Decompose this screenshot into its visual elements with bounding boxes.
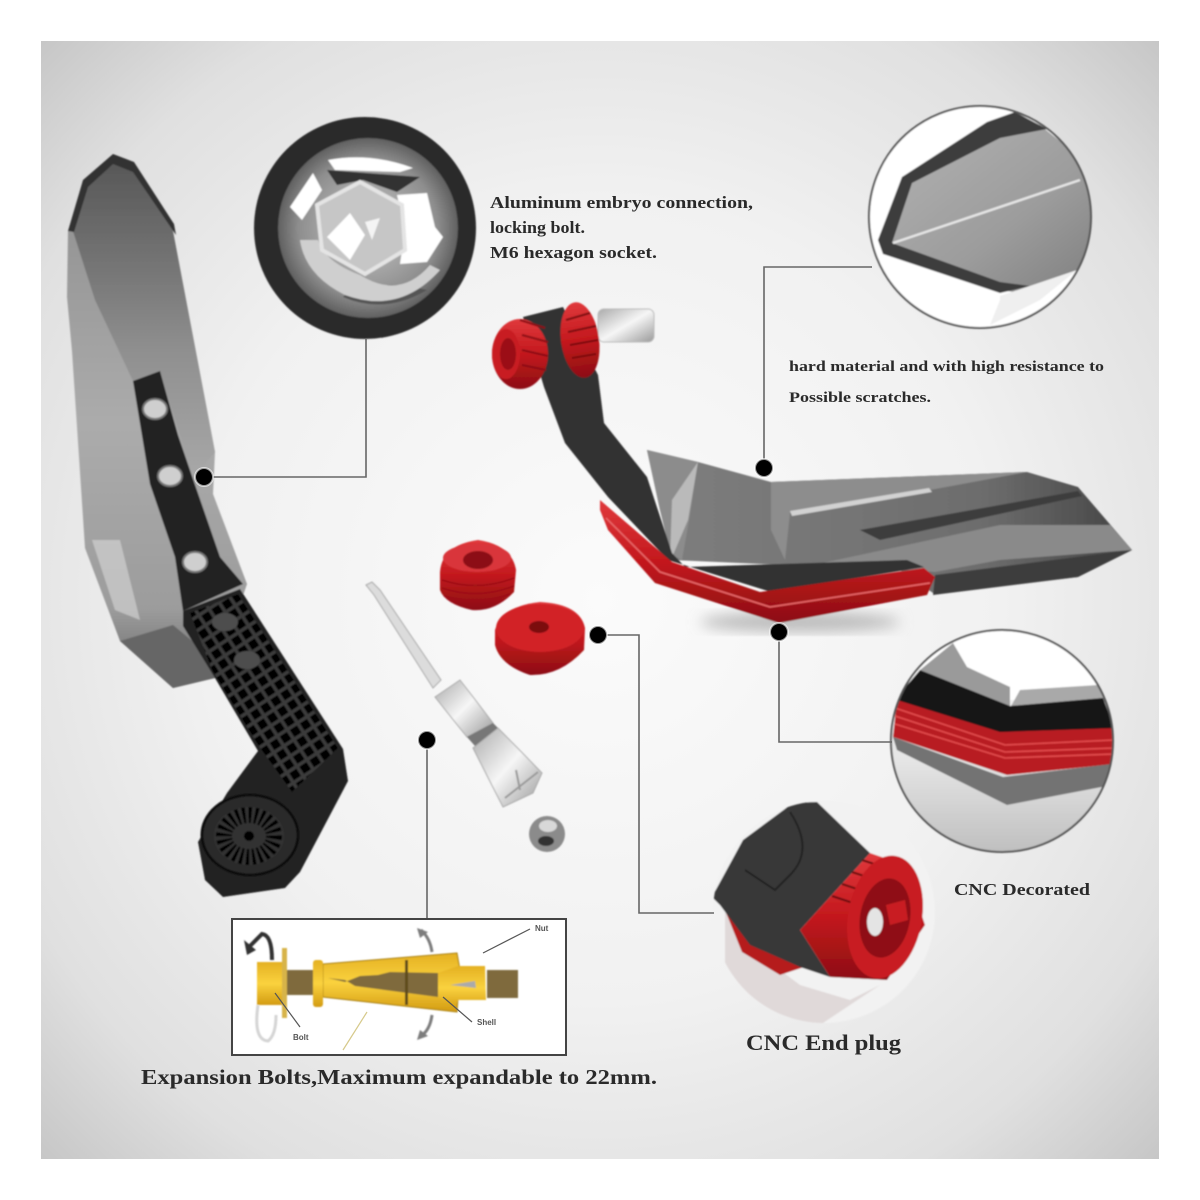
black arm — [523, 307, 924, 592]
diagram labels: Nut — [535, 924, 549, 933]
text: aluminum embryo connection — [490, 193, 753, 262]
diagram labels: Bolt — [293, 1033, 309, 1042]
diagram pointers — [275, 929, 530, 1050]
text: expansion bolts: Expansion Bolts,Maximum expandable to 22mm. — [141, 1065, 657, 1089]
right hand guard product — [492, 300, 1132, 632]
connector lines — [204, 267, 892, 918]
text: CNC end plug: CNC End plug — [746, 1030, 901, 1055]
callout circle: hex socket bolt — [254, 117, 476, 339]
text: hard material: Possible scratches. — [789, 390, 931, 406]
expansion bolt parts — [366, 582, 565, 852]
text: aluminum embryo connection: M6 hexagon socket. — [490, 243, 657, 262]
black ribbed lever bracket — [183, 589, 348, 897]
smoked shield upper face — [72, 159, 215, 479]
black mount strip — [133, 371, 243, 611]
red end caps — [492, 300, 604, 389]
left hand guard product — [67, 154, 348, 897]
callout circle: CNC decorated trim — [890, 625, 1115, 852]
mount bolts — [143, 399, 207, 572]
expansion bolt diagram — [232, 919, 566, 1055]
red end plug parts — [440, 540, 585, 675]
text: CNC decorated: CNC Decorated — [954, 880, 1091, 899]
smoked shield lower translucent part — [67, 157, 247, 688]
gold bolt body — [257, 948, 518, 1018]
ribbed round foot — [202, 795, 298, 875]
text: aluminum embryo connection: Aluminum embryo connection, — [490, 193, 753, 212]
rotation and expansion arrows — [244, 928, 432, 1041]
text: hard material — [789, 359, 1104, 406]
callout circle: CNC end plug — [712, 801, 935, 1025]
smoked shield — [647, 450, 1132, 593]
red trim — [600, 500, 935, 623]
diagram labels: Shell — [477, 1018, 496, 1027]
text: aluminum embryo connection: locking bolt. — [490, 218, 585, 237]
bracket holes — [212, 613, 238, 631]
silver bolt — [598, 309, 654, 342]
text: hard material: hard material and with high resistance to — [789, 359, 1104, 375]
shadow under guard — [700, 612, 900, 632]
callout circle: shield surface — [869, 106, 1095, 328]
marker dots — [195, 459, 788, 749]
diagram labels — [293, 924, 549, 1042]
